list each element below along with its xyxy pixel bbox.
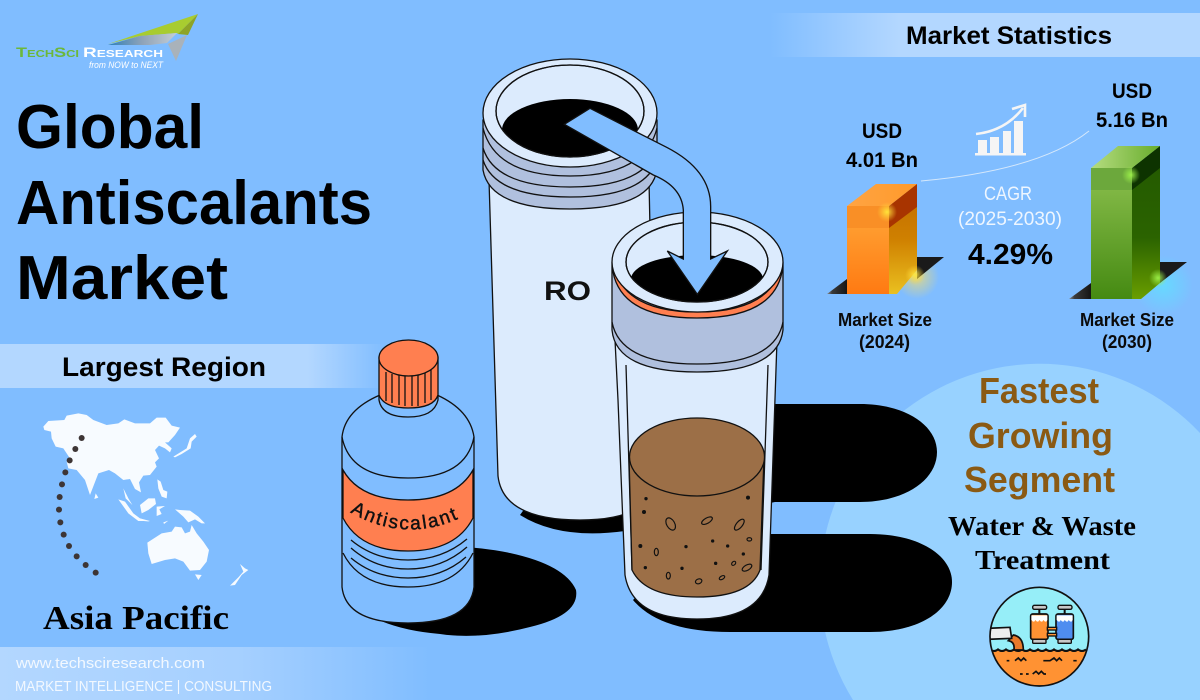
label: Antiscalant: Antiscalant: [350, 502, 458, 530]
icon: water treatment: [987, 587, 1093, 690]
neck ring: [379, 395, 438, 417]
title: [16, 93, 372, 313]
label: market size 2024: [838, 310, 932, 352]
cylinder body: [489, 180, 655, 520]
arrow: transfer between cylinders: [564, 108, 727, 294]
title: Antiscalants: [16, 169, 372, 238]
band: market statistics: [770, 13, 1200, 57]
footer text: www.techsciresearch.com: [15, 655, 205, 672]
value: USD 5.16 Bn: 5.16 Bn: [1096, 109, 1168, 132]
bar: market size 2030: [1069, 146, 1193, 315]
heading: largest region: Largest Region: [62, 352, 266, 382]
label: market size 2030: (2030): [1102, 332, 1152, 352]
dotted path: [56, 435, 99, 576]
orange stripe: [613, 263, 782, 318]
RO cylinder: [483, 59, 657, 520]
label: Asia Pacific: Asia Pacific: [43, 600, 229, 637]
heading: fastest growing segment: Fastest: [979, 370, 1099, 411]
label: market size 2030: [1080, 310, 1174, 352]
value: USD 4.01 Bn: USD: [862, 120, 902, 143]
band: largest region: [0, 344, 385, 388]
inner wall: [626, 365, 768, 570]
CAGR block: (2025-2030): [958, 209, 1062, 230]
title: Global: [16, 93, 204, 162]
heading: market statistics: Market Statistics: [906, 22, 1112, 50]
value: USD 4.01 Bn: 4.01 Bn: [846, 149, 918, 172]
cylinder body: [615, 340, 777, 619]
value: USD 5.16 Bn: [1096, 80, 1168, 132]
band: footer: [0, 647, 430, 700]
text: water and waste treatment: [948, 511, 1136, 575]
text: water and waste treatment: Water & Waste: [948, 511, 1136, 541]
logo: TechSci Research: [16, 14, 198, 71]
ribbed lines: [343, 539, 473, 587]
text: water and waste treatment: Treatment: [975, 545, 1110, 575]
label: market size 2024: Market Size: [838, 310, 932, 330]
soil: [629, 418, 764, 597]
footer text: [15, 655, 272, 695]
label: [343, 470, 473, 551]
bottle body: [342, 395, 474, 623]
logo: TechSci Research: Research: [83, 44, 163, 60]
sample cylinder: [612, 212, 783, 619]
threaded rings: [483, 120, 657, 209]
value: USD 4.01 Bn: [846, 120, 918, 172]
CAGR block: [958, 184, 1062, 271]
top rim: [612, 212, 783, 312]
top rim: [483, 59, 657, 167]
bar: market size 2024: [827, 184, 944, 299]
label: RO: RO: [544, 276, 591, 306]
CAGR block: 4.29%: [968, 239, 1053, 271]
growth connector line: [921, 131, 1089, 181]
heading: fastest growing segment: [964, 370, 1115, 500]
heading: fastest growing segment: Segment: [964, 459, 1115, 500]
antiscalant bottle: [342, 340, 474, 623]
cap band: [612, 263, 783, 372]
illustration shadows: [360, 404, 952, 636]
background circle: fastest growing segment: [820, 364, 1200, 700]
dark opening: [631, 255, 763, 303]
heading: fastest growing segment: Growing: [968, 415, 1113, 456]
dark opening: [502, 99, 638, 161]
cap: [379, 357, 438, 408]
logo: TechSci Research: TechSci: [16, 44, 79, 60]
title: Market: [16, 244, 228, 313]
footer text: MARKET INTELLIGENCE | CONSULTING: [15, 678, 272, 695]
label: market size 2024: (2024): [859, 332, 910, 352]
icon: growth chart: [975, 105, 1026, 156]
value: USD 5.16 Bn: USD: [1112, 80, 1152, 103]
map: Asia Pacific: [43, 413, 248, 586]
CAGR block: CAGR: [984, 184, 1032, 205]
logo: TechSci Research: from NOW to NEXT: [89, 60, 164, 71]
label: market size 2030: Market Size: [1080, 310, 1174, 330]
